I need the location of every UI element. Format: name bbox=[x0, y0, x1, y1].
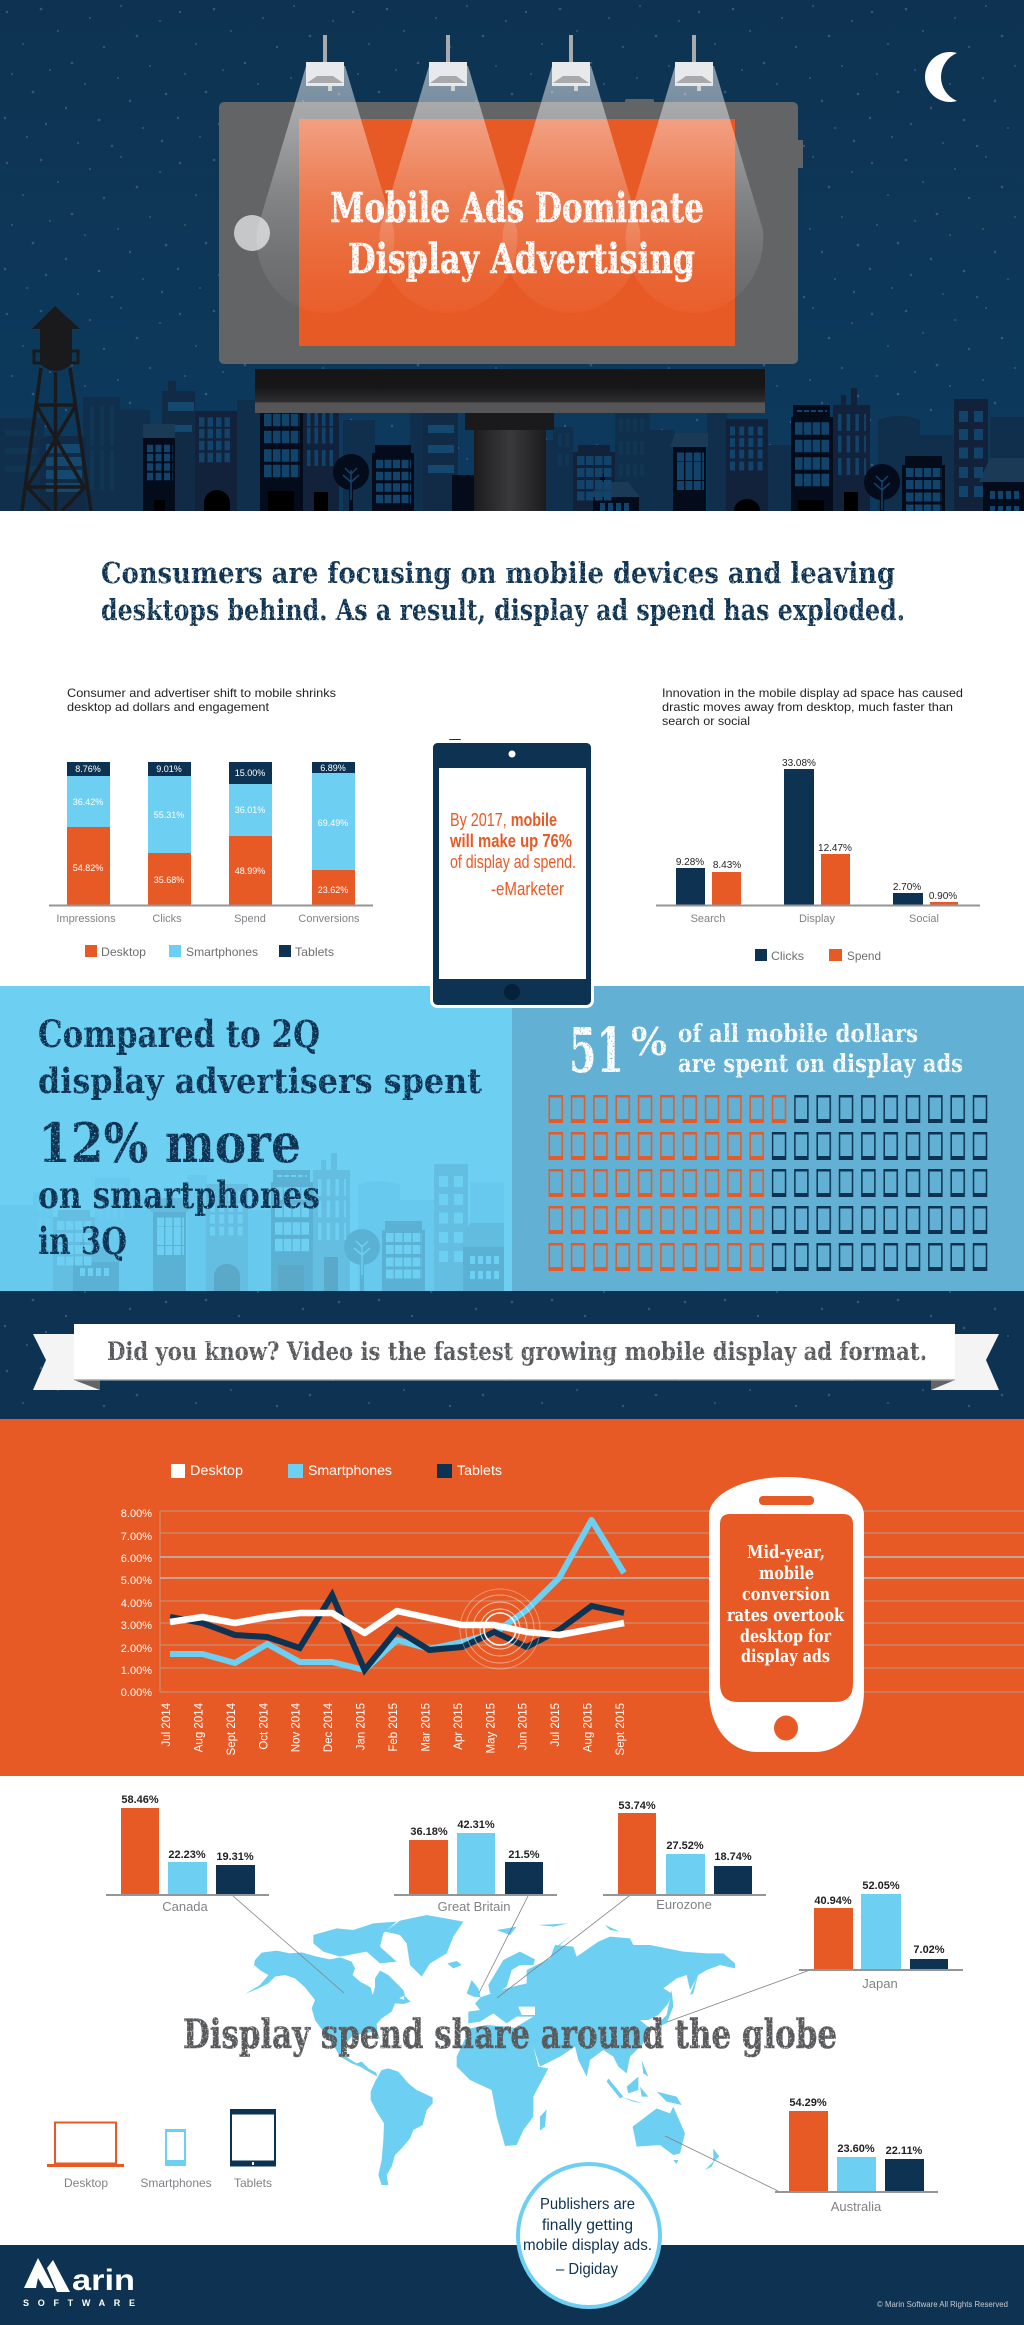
y axis labels: 7.00% bbox=[121, 1531, 152, 1543]
text: 51% statement: % bbox=[631, 1019, 667, 1064]
logo: Marin Software: SOFTWARE bbox=[23, 2298, 135, 2308]
stacked bar chart: Impressions bbox=[56, 913, 116, 925]
chart: Canada: 58.46% bbox=[121, 1794, 159, 1806]
stacked bar chart: 54.82% bbox=[73, 863, 103, 873]
callout: Digiday quote: Publishers are bbox=[540, 2196, 635, 2213]
icon: tablet with eMarketer quote bbox=[430, 739, 592, 1006]
grouped bar chart: 2.70% bbox=[893, 882, 921, 893]
title: Mobile Ads Dominate bbox=[330, 184, 704, 232]
quote text bbox=[449, 810, 576, 899]
callout: Digiday quote: mobile display ads. bbox=[523, 2237, 652, 2254]
caption: stacked chart: desktop ad dollars and engagement bbox=[67, 700, 270, 714]
stacked bar chart: 23.62% bbox=[318, 885, 348, 895]
icon: crescent moon bbox=[925, 52, 957, 102]
legend: stacked chart bbox=[85, 945, 334, 959]
line: desktop bbox=[170, 1611, 624, 1635]
y axis labels: 3.00% bbox=[121, 1620, 152, 1632]
callout text: desktop for bbox=[740, 1626, 831, 1647]
quote text: will make up 76% bbox=[449, 831, 572, 851]
chart: Eurozone: 53.74% bbox=[618, 1800, 656, 1812]
chart: Eurozone: 27.52% bbox=[666, 1840, 704, 1852]
y axis labels: 1.00% bbox=[121, 1665, 152, 1677]
panel: white content section bbox=[0, 511, 1024, 986]
legend: grouped chart: Clicks bbox=[771, 949, 804, 963]
stacked bar chart: 36.01% bbox=[235, 805, 265, 815]
panel: compared to 2Q bbox=[0, 986, 512, 1291]
y axis labels: 2.00% bbox=[121, 1643, 152, 1655]
grouped bar chart: Social bbox=[909, 913, 939, 925]
y axis labels: 6.00% bbox=[121, 1553, 152, 1565]
chart: Canada: Canada bbox=[162, 1899, 209, 1914]
billboard frame bbox=[219, 99, 803, 364]
panel: globe section bbox=[0, 1776, 1024, 2245]
caption: grouped chart: Innovation in the mobile display ad space has caused bbox=[662, 686, 963, 700]
chart: Australia: Australia bbox=[831, 2199, 882, 2214]
text: 12% more statement: display advertisers spent bbox=[38, 1061, 482, 1102]
callout: Digiday quote: finally getting bbox=[542, 2217, 633, 2234]
chart: Great Britain bbox=[394, 1819, 557, 1914]
stacked bar chart: 15.00% bbox=[235, 768, 265, 778]
caption: grouped chart bbox=[662, 686, 963, 728]
panel: night sky header with billboard bbox=[0, 0, 1024, 526]
chart: Australia bbox=[775, 2097, 938, 2214]
chart: Japan: 40.94% bbox=[814, 1895, 852, 1907]
callout text: display ads bbox=[741, 1646, 830, 1667]
panel: conversion rate line chart bbox=[0, 1419, 1024, 1776]
caption: grouped chart: drastic moves away from desktop, much faster than bbox=[662, 700, 953, 714]
line: tablets bbox=[170, 1595, 624, 1670]
chart: Australia: 22.11% bbox=[886, 2145, 923, 2157]
chart: Great Britain: 21.5% bbox=[508, 1849, 540, 1861]
y axis labels: 5.00% bbox=[121, 1575, 152, 1587]
text: 12% more statement: Compared to 2Q bbox=[38, 1012, 320, 1056]
legend: device icons: Desktop bbox=[64, 2176, 108, 2190]
text: 12% more statement: 12% more bbox=[38, 1111, 301, 1175]
grid lines bbox=[160, 1511, 1024, 1692]
copyright: © Marin Software All Rights Reserved bbox=[877, 2299, 1008, 2309]
spotlight beams bbox=[257, 66, 763, 313]
stacked bar chart: Spend bbox=[234, 913, 266, 925]
y axis labels: 0.00% bbox=[121, 1687, 152, 1699]
grouped bar chart: 12.47% bbox=[818, 843, 852, 854]
month labels: May 2015 bbox=[485, 1703, 497, 1754]
billboard stand bbox=[255, 369, 765, 511]
ribbon banner bbox=[33, 1324, 999, 1390]
month labels: Aug 2014 bbox=[193, 1702, 205, 1752]
highlight: crossover rings bbox=[460, 1589, 540, 1669]
stacked bar chart: 69.49% bbox=[318, 818, 348, 828]
chart: Japan bbox=[799, 1880, 963, 1991]
stacked bar chart: 8.76% bbox=[75, 764, 101, 774]
month labels: Aug 2015 bbox=[583, 1703, 595, 1752]
month labels: Oct 2014 bbox=[258, 1702, 270, 1750]
heading: display spend share: Display spend share around the globe bbox=[183, 2011, 837, 2058]
legend: device icons bbox=[47, 2109, 276, 2190]
stacked bar chart: 36.42% bbox=[73, 797, 103, 807]
chart: Australia: 23.60% bbox=[837, 2143, 875, 2155]
icon: white phone callout bbox=[709, 1477, 864, 1752]
stacked bar chart: 6.89% bbox=[320, 763, 346, 773]
icon grid: 100 phones, 51 orange bbox=[548, 1095, 990, 1271]
chart: Canada: 22.23% bbox=[168, 1849, 206, 1861]
chart: Australia: 54.29% bbox=[789, 2097, 827, 2109]
legend: line chart: Smartphones bbox=[308, 1462, 392, 1478]
chart: Eurozone: Eurozone bbox=[656, 1897, 712, 1912]
caption: grouped chart: search or social bbox=[662, 714, 750, 728]
month labels: Jul 2014 bbox=[161, 1702, 173, 1746]
month labels: Jan 2015 bbox=[356, 1703, 368, 1750]
text: 12% more statement: in 3Q bbox=[38, 1219, 127, 1263]
chart: Great Britain: 36.18% bbox=[410, 1826, 448, 1838]
legend: grouped chart bbox=[755, 949, 881, 963]
y axis labels: 4.00% bbox=[121, 1598, 152, 1610]
legend: device icons: Smartphones bbox=[140, 2176, 212, 2190]
logo: Marin Software bbox=[23, 2258, 135, 2308]
caption: stacked chart bbox=[67, 686, 336, 714]
grouped bar chart: 0.90% bbox=[929, 891, 957, 902]
callout text: conversion bbox=[742, 1584, 830, 1605]
title: Display Advertising bbox=[348, 235, 695, 283]
text: 51% statement: 51 bbox=[569, 1014, 624, 1087]
heading: consumers: Consumers are focusing on mobile devices and leaving bbox=[101, 556, 895, 590]
legend: stacked chart: Desktop bbox=[101, 945, 146, 959]
month labels: Jun 2015 bbox=[518, 1703, 530, 1750]
stacked bar chart: 55.31% bbox=[154, 810, 184, 820]
caption: stacked chart: Consumer and advertiser shift to mobile shrinks bbox=[67, 686, 336, 700]
chart: Great Britain: Great Britain bbox=[438, 1899, 510, 1914]
chart: Japan: 52.05% bbox=[862, 1880, 900, 1892]
y axis labels: 8.00% bbox=[121, 1508, 152, 1520]
month labels bbox=[161, 1702, 627, 1755]
text: 51% statement: are spent on display ads bbox=[678, 1049, 963, 1078]
icon: tablet bbox=[230, 2109, 276, 2166]
icon: billboard lamps bbox=[306, 35, 713, 91]
line: smartphones bbox=[170, 1520, 624, 1670]
quote text: By 2017, mobile bbox=[450, 810, 557, 830]
grouped bar chart: 33.08% bbox=[782, 758, 816, 769]
legend: device icons: Tablets bbox=[234, 2176, 272, 2190]
text: 12% more statement: on smartphones bbox=[38, 1173, 320, 1217]
month labels: Apr 2015 bbox=[453, 1703, 465, 1750]
leader lines bbox=[233, 1896, 810, 2191]
callout text: mobile bbox=[759, 1563, 814, 1584]
month labels: Nov 2014 bbox=[291, 1702, 303, 1752]
city skyline bbox=[0, 381, 1024, 511]
stacked bar chart: Clicks bbox=[152, 913, 182, 925]
stacked bar chart: 35.68% bbox=[154, 875, 184, 885]
stacked bar chart bbox=[49, 762, 373, 925]
chart: Canada: 19.31% bbox=[216, 1851, 254, 1863]
chart: Canada bbox=[106, 1794, 269, 1914]
stacked bar chart: 9.01% bbox=[156, 764, 182, 774]
text: 12% more statement bbox=[38, 1012, 482, 1263]
quote text: of display ad spend. bbox=[450, 852, 576, 872]
chart: Japan: Japan bbox=[862, 1976, 898, 1991]
icon: water tower bbox=[22, 306, 91, 511]
icon: desktop bbox=[47, 2122, 124, 2167]
text: 51% statement bbox=[569, 1014, 963, 1087]
panel: 51 percent of mobile dollars bbox=[512, 986, 1024, 1291]
footer band bbox=[0, 2245, 1024, 2325]
stacked bar chart: Conversions bbox=[298, 913, 360, 925]
legend: stacked chart: Tablets bbox=[295, 945, 334, 959]
y axis labels bbox=[121, 1508, 152, 1699]
grouped bar chart: 8.43% bbox=[713, 860, 741, 871]
chart: Japan: 7.02% bbox=[913, 1944, 945, 1956]
month labels: Mar 2015 bbox=[420, 1703, 432, 1752]
icon: smartphone bbox=[165, 2129, 186, 2166]
grouped bar chart: 9.28% bbox=[676, 857, 704, 868]
callout text: Mid-year, bbox=[747, 1542, 825, 1563]
callout text: rates overtook bbox=[727, 1605, 844, 1626]
grouped bar chart bbox=[656, 758, 980, 925]
month labels: Sept 2014 bbox=[226, 1702, 238, 1755]
month labels: Jul 2015 bbox=[550, 1703, 562, 1746]
text: 51% statement: of all mobile dollars bbox=[678, 1019, 918, 1048]
title bbox=[330, 184, 704, 283]
legend: line chart: Desktop bbox=[190, 1462, 243, 1478]
callout text bbox=[727, 1542, 844, 1667]
world map bbox=[245, 1915, 735, 2185]
month labels: Feb 2015 bbox=[388, 1703, 400, 1752]
chart: Eurozone: 18.74% bbox=[714, 1851, 752, 1863]
legend: line chart: Tablets bbox=[457, 1462, 502, 1478]
quote text: -eMarketer bbox=[491, 879, 564, 899]
heading: consumers bbox=[101, 556, 905, 627]
legend: grouped chart: Spend bbox=[847, 949, 881, 963]
faded city skyline bbox=[53, 1153, 504, 1291]
callout: Digiday quote bbox=[518, 2164, 660, 2307]
month labels: Dec 2014 bbox=[323, 1702, 335, 1752]
logo: Marin Software: arin bbox=[72, 2264, 135, 2297]
legend: line chart bbox=[171, 1462, 502, 1478]
callout: Digiday quote: – Digiday bbox=[556, 2261, 618, 2278]
chart: Great Britain: 42.31% bbox=[457, 1819, 495, 1831]
grouped bar chart: Search bbox=[691, 913, 725, 925]
chart: Eurozone bbox=[603, 1800, 766, 1912]
panel: did you know band bbox=[0, 1291, 1024, 1419]
legend: stacked chart: Smartphones bbox=[186, 945, 258, 959]
grouped bar chart: Display bbox=[799, 913, 836, 925]
stacked bar chart: 48.99% bbox=[235, 866, 265, 876]
month labels: Sept 2015 bbox=[615, 1703, 627, 1755]
